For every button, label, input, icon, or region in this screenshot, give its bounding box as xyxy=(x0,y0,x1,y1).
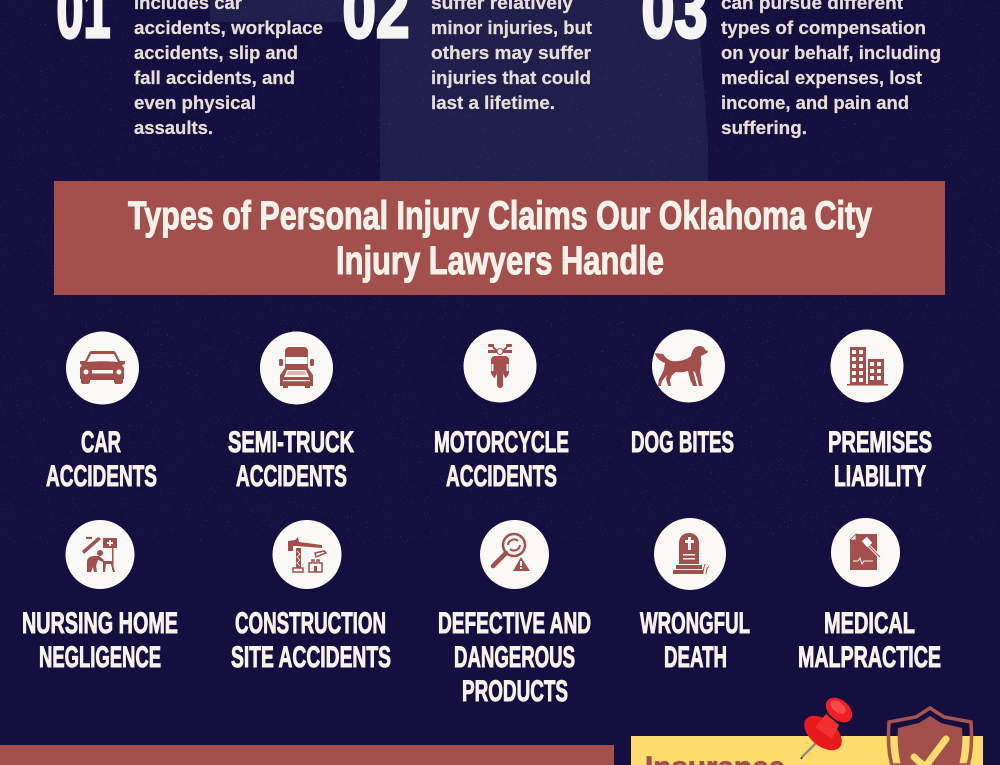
text block 03: types of compensation xyxy=(721,18,926,38)
label: defective and dangerous products: DEFECTIVE AND xyxy=(438,607,591,640)
item: construction site accidents xyxy=(231,520,391,674)
item: nursing home negligence xyxy=(22,520,178,674)
icon: red push pin xyxy=(798,693,857,759)
text block 01: fall accidents, and xyxy=(134,68,295,88)
label: defective and dangerous products: DANGEROUS xyxy=(454,641,575,674)
text block 01: accidents, workplace xyxy=(134,18,323,38)
label: premises liability: PREMISES xyxy=(828,426,932,459)
icon: motorcycle xyxy=(488,344,512,388)
label: premises liability: LIABILITY xyxy=(834,460,926,493)
icon: tombstone xyxy=(673,533,709,574)
label: dog bites: DOG BITES xyxy=(631,426,734,459)
icon: car xyxy=(80,351,125,384)
text block 02: injuries that could xyxy=(431,68,591,88)
text block 03: income, and pain and xyxy=(721,93,909,113)
label: nursing home negligence: NEGLIGENCE xyxy=(39,641,161,674)
label: wrongful death: DEATH xyxy=(664,641,727,674)
point 02 xyxy=(342,0,592,113)
label: car accidents xyxy=(46,426,157,493)
label: car accidents: ACCIDENTS xyxy=(46,460,157,493)
item: motorcycle accidents xyxy=(434,330,569,493)
label: semi-truck accidents: ACCIDENTS xyxy=(236,460,347,493)
label: wrongful death: WRONGFUL xyxy=(640,607,750,640)
label: motorcycle accidents: ACCIDENTS xyxy=(446,460,557,493)
label: nursing home negligence: NURSING HOME xyxy=(22,607,178,640)
point 01 xyxy=(56,0,323,138)
item: wrongful death xyxy=(640,518,750,674)
text block 01: assaults. xyxy=(134,118,213,138)
text block 01: even physical xyxy=(134,93,256,113)
background silhouette xyxy=(210,0,708,181)
icon: shield with check xyxy=(888,708,972,765)
icon: buildings xyxy=(847,347,888,386)
label: medical malpractice xyxy=(798,607,941,674)
label: construction site accidents: SITE ACCIDENTS xyxy=(231,641,391,674)
insurance note card xyxy=(631,736,983,765)
point 03 xyxy=(642,0,941,138)
banner heading text xyxy=(128,194,873,283)
item: dog bites xyxy=(631,330,734,459)
icon: semi truck xyxy=(279,347,314,388)
label: medical malpractice: MEDICAL xyxy=(824,607,915,640)
label: semi-truck accidents xyxy=(228,426,354,493)
label: defective and dangerous products: PRODUCTS xyxy=(462,675,568,708)
text block 02: minor injuries, but xyxy=(431,18,592,38)
text block 02: others may suffer xyxy=(431,43,591,63)
text block 01 xyxy=(134,0,323,138)
text block 03: suffering. xyxy=(721,118,807,138)
label: semi-truck accidents: SEMI-TRUCK xyxy=(228,426,354,459)
item: medical malpractice xyxy=(798,518,941,674)
label: motorcycle accidents: MOTORCYCLE xyxy=(434,426,569,459)
label: wrongful death xyxy=(640,607,750,674)
label: construction site accidents xyxy=(231,607,391,674)
text block 03: medical expenses, lost xyxy=(721,68,922,88)
item: car accidents xyxy=(46,332,157,493)
text block 03: on your behalf, including xyxy=(721,43,941,63)
text block 02: last a lifetime. xyxy=(431,93,555,113)
item: defective and dangerous products xyxy=(438,520,591,708)
label: premises liability xyxy=(828,426,932,493)
item: semi-truck accidents xyxy=(228,332,354,493)
heading banner xyxy=(54,181,945,295)
label: nursing home negligence xyxy=(22,607,178,674)
label: motorcycle accidents xyxy=(434,426,569,493)
label: construction site accidents: CONSTRUCTION xyxy=(235,607,386,640)
text block 01: accidents, slip and xyxy=(134,43,298,63)
label: car accidents: CAR xyxy=(81,426,121,459)
bottom red panel xyxy=(0,745,614,765)
icon: nursing home xyxy=(82,537,117,572)
item: premises liability xyxy=(828,330,932,493)
banner heading text: Injury Lawyers Handle xyxy=(336,239,664,283)
text block 02 xyxy=(431,0,592,113)
icon: magnifier with warning xyxy=(493,534,530,571)
icon: dog xyxy=(655,346,708,386)
label: defective and dangerous products xyxy=(438,607,591,708)
icon: crane xyxy=(288,537,326,572)
icon: document with gavel xyxy=(850,534,880,570)
text block 03 xyxy=(721,0,941,138)
